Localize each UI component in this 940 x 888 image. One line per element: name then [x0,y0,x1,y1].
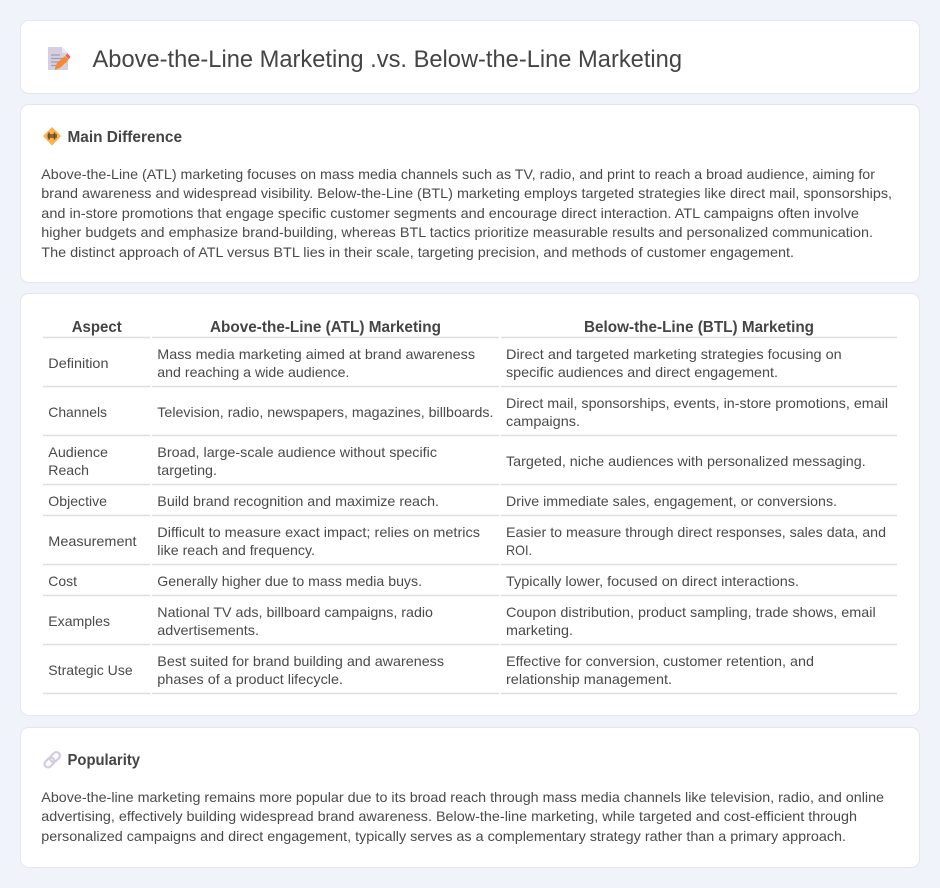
row: examples: National TV ads, billboard campaigns, radio [157,604,433,620]
row: measurement [48,524,886,558]
row: channels: campaigns. [506,413,580,429]
row: examples: Examples [48,613,110,629]
text block: main difference body: Above-the-Line (ATL) marketing focuses on mass media channels such as TV, radio, and print to reach a broad audience, aiming for [41,166,875,182]
row: objective: Drive immediate sales, engagement, or conversions. [506,493,837,509]
row: definition: Mass media marketing aimed at brand awareness [157,346,475,362]
text block: popularity body: Above-the-line marketing remains more popular due to its broad reach through mass media channels like television, radio, and online [41,789,884,805]
panel: popularity [20,728,920,868]
heading: popularity: Popularity [68,752,140,769]
row: definition: specific audiences and direct engagement. [506,364,778,380]
text block: popularity body: advertising, effectively building widespread brand awareness. Below-the-line marketing, while targeted and cost-efficient through [41,808,857,824]
row: channels: Direct mail, sponsorships, events, in-store promotions, email [506,395,888,411]
row: cost: Cost [48,573,77,589]
row: cost: Typically lower, focused on direct interactions. [506,573,799,589]
row: audience reach: targeting. [157,462,217,478]
row: measurement: Difficult to measure exact impact; relies on metrics [157,524,480,540]
row: objective: Objective [48,493,107,509]
row: strategic use: Effective for conversion, customer retention, and [506,653,814,669]
text block: main difference body: higher budgets and emphasize brand-building, whereas BTL tactics prioritize measurable results and personalized communication. [41,224,873,240]
panel: comparison table [20,294,920,716]
row: audience reach: Reach [48,462,89,478]
row: measurement: Measurement [48,533,137,549]
row: objective: Build brand recognition and maximize reach. [157,493,439,509]
row: strategic use [48,653,814,687]
table header row: Above-the-Line (ATL) Marketing [210,319,441,336]
row: measurement: Easier to measure through direct responses, sales data, and [506,524,886,540]
row: examples: advertisements. [157,622,259,638]
row: channels: Channels [48,404,107,420]
row: strategic use: Strategic Use [48,662,133,678]
row: audience reach: Targeted, niche audiences with personalized messaging. [506,453,866,469]
text block: main difference body [41,166,892,260]
text block: main difference body: The distinct approach of ATL versus BTL lies in their scale, targeting precision, and methods of customer engagement. [41,244,794,260]
row: channels: Television, radio, newspapers, magazines, billboards. [157,404,494,420]
icon: document with pencil [48,47,70,70]
row: strategic use: Best suited for brand building and awareness [157,653,444,669]
text block: popularity body [41,789,884,844]
row: measurement: ROI. [506,542,532,558]
row: measurement: like reach and frequency. [157,542,315,558]
table header row: Below-the-Line (BTL) Marketing [584,319,814,336]
row: cost: Generally higher due to mass media buys. [157,573,422,589]
row: examples: marketing. [506,622,573,638]
row: cost [48,573,799,589]
text block: main difference body: brand awareness and widespread visibility. Below-the-Line (BTL) marketing employs targeted strategies like direct mail, sponsorships, [41,185,892,201]
row: definition: and reaching a wide audience. [157,364,350,380]
row: definition: Direct and targeted marketing strategies focusing on [506,346,842,362]
row: examples [48,604,876,638]
icon: orange diamond sign [44,128,60,144]
panel: title card [20,20,920,94]
icon: chain link [43,751,61,769]
row: strategic use: relationship management. [506,671,672,687]
row: audience reach [48,444,866,478]
title: Above-the-Line Marketing .vs. Below-the-Line Marketing [92,46,682,73]
row: objective [48,493,837,509]
row: audience reach: Broad, large-scale audience without specific [157,444,437,460]
row: examples: Coupon distribution, product sampling, trade shows, email [506,604,876,620]
row: definition [48,346,842,380]
row: strategic use: phases of a product lifecycle. [157,671,343,687]
text block: main difference body: and in-store promotions that engage specific customer segments and encourage direct interaction. ATL campaigns often involve [41,205,859,221]
row: audience reach: Audience [48,444,108,460]
row: channels [48,395,888,429]
panel: main difference [20,104,920,282]
text block: popularity body: personalized campaigns and direct engagement, typically serves as a complementary strategy rather than a primary approach. [41,828,846,844]
table header row [72,319,814,336]
table header row: Aspect [72,319,122,336]
row: definition: Definition [48,355,108,371]
heading: main difference: Main Difference [68,129,182,146]
